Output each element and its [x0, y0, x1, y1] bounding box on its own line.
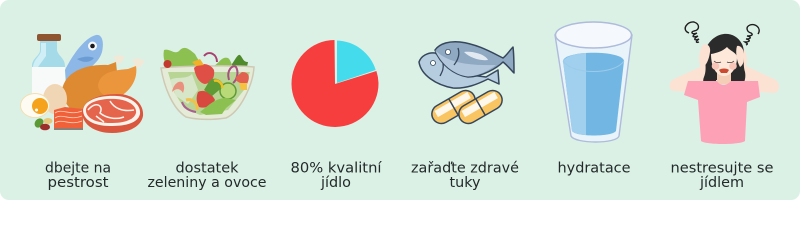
icon: capsule right: [455, 87, 506, 127]
left arm: [670, 47, 712, 92]
right arm: [736, 46, 779, 93]
salad leaves: [164, 48, 205, 76]
hands: [699, 44, 710, 68]
icon: fried egg: [20, 94, 50, 118]
stress spirals: [685, 22, 699, 42]
label: dbejte na pestrost: pestrost: [48, 175, 109, 191]
icon: salad bowl: [161, 48, 254, 119]
icon: steak: [82, 94, 143, 133]
slice: 80% red: [292, 40, 379, 127]
icon: capsule left: [428, 87, 479, 127]
icon: stressed woman: [670, 22, 779, 144]
label: dostatek zeleniny a ovoce: zeleniny a ovoce: [148, 175, 267, 191]
label: zařaďte zdravé tuky: [411, 160, 519, 191]
label: 80% kvalitní jídlo: [290, 160, 382, 191]
salad contents: [164, 53, 250, 115]
label: nestresujte se jídlem: jídlem: [699, 175, 744, 191]
face: [711, 47, 737, 76]
hair: [703, 34, 745, 93]
icon: fish and capsules: [419, 42, 514, 127]
pink shirt: [684, 81, 760, 144]
label: nestresujte se jídlem: nestresujte se: [670, 160, 774, 176]
label: zařaďte zdravé tuky: zařaďte zdravé: [411, 160, 519, 176]
icon: back fish: [435, 42, 514, 77]
water: [563, 53, 624, 136]
icon: salmon: [54, 107, 83, 130]
label: nestresujte se jídlem: [670, 160, 774, 191]
label: zařaďte zdravé tuky: tuky: [450, 175, 481, 191]
glass rim: [556, 22, 632, 48]
icon: roast chicken: [62, 55, 145, 110]
label: dbejte na pestrost: [45, 160, 111, 191]
icon: front fish: [419, 53, 499, 88]
icon: brown egg: [43, 84, 67, 114]
icon: assorted foods: [20, 34, 145, 133]
bowl: [161, 66, 254, 119]
label: 80% kvalitní jídlo: 80% kvalitní: [290, 160, 382, 176]
pie chart: 80%: [292, 40, 379, 127]
neck: [717, 72, 731, 84]
label: dostatek zeleniny a ovoce: dostatek: [176, 160, 239, 176]
label: hydratace: hydratace: [558, 160, 631, 176]
icon: glass of water: [555, 22, 632, 142]
icon: beans: [33, 117, 52, 130]
icon: milk bottle: [32, 34, 65, 105]
label: dbejte na pestrost: dbejte na: [45, 160, 111, 176]
label: 80% kvalitní jídlo: jídlo: [320, 175, 351, 191]
label: dostatek zeleniny a ovoce: [148, 160, 267, 191]
slice: 20% cyan: [337, 40, 376, 83]
icon: blue fish: [65, 35, 103, 82]
